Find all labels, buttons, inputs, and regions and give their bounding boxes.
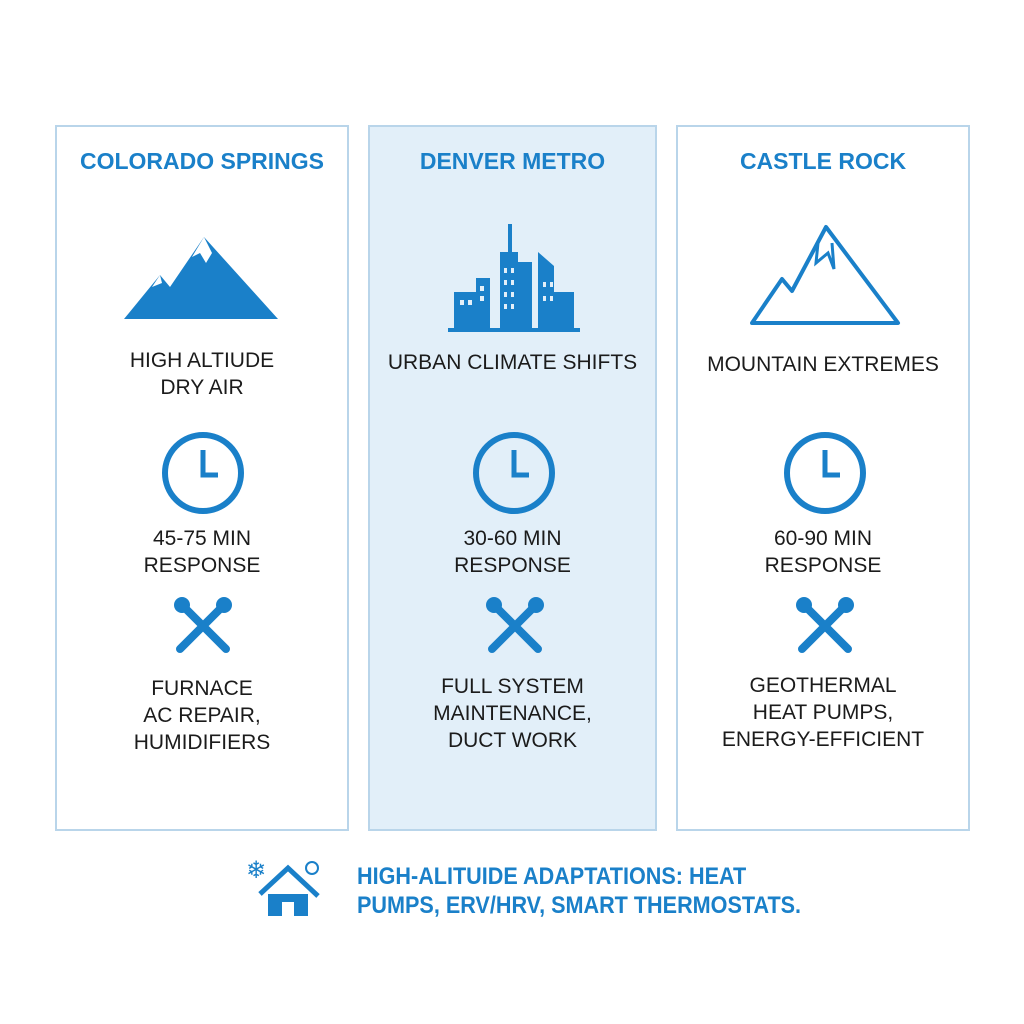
text: services: AC REPAIR, bbox=[143, 704, 261, 727]
text: services: FURNACE bbox=[151, 677, 253, 700]
text: response: RESPONSE bbox=[144, 554, 260, 577]
icon: tools bbox=[796, 597, 854, 653]
text: services: FULL SYSTEM bbox=[441, 675, 584, 698]
icon: mountain bbox=[124, 237, 278, 319]
text: services bbox=[134, 677, 270, 754]
footer text: PUMPS, ERV/HRV, SMART THERMOSTATS. bbox=[357, 892, 801, 919]
text: response: 30-60 MIN bbox=[463, 527, 562, 550]
icon: tools bbox=[486, 597, 544, 653]
text: climate: URBAN CLIMATE SHIFTS bbox=[388, 351, 637, 374]
icon: mountain outline bbox=[750, 224, 900, 325]
text: services: HUMIDIFIERS bbox=[134, 731, 270, 754]
heading: denver metro: DENVER METRO bbox=[420, 148, 605, 174]
text: services: HEAT PUMPS, bbox=[753, 701, 893, 724]
icon: clock bbox=[473, 432, 555, 514]
text: response: RESPONSE bbox=[765, 554, 881, 577]
text: response bbox=[144, 527, 260, 577]
icon: house with snow and sun: ❄ bbox=[246, 856, 266, 884]
text: response: 45-75 MIN bbox=[153, 527, 251, 550]
text: response bbox=[454, 527, 571, 577]
panel: denver metro bbox=[368, 125, 657, 831]
text: services: GEOTHERMAL bbox=[749, 674, 897, 697]
panel: castle rock bbox=[676, 125, 970, 831]
panel: colorado springs bbox=[55, 125, 349, 831]
text: services: ENERGY-EFFICIENT bbox=[722, 728, 924, 751]
footer text: HIGH-ALITUIDE ADAPTATIONS: HEAT bbox=[357, 863, 746, 890]
text: services: DUCT WORK bbox=[448, 729, 577, 752]
icon: clock bbox=[162, 432, 244, 514]
icon: city bbox=[448, 224, 580, 332]
text: climate: MOUNTAIN EXTREMES bbox=[707, 353, 939, 376]
heading: castle rock: CASTLE ROCK bbox=[740, 148, 906, 174]
icon: clock bbox=[784, 432, 866, 514]
text: climate bbox=[130, 349, 274, 399]
text: response: RESPONSE bbox=[454, 554, 571, 577]
text: climate: DRY AIR bbox=[160, 376, 244, 399]
text: response bbox=[765, 527, 881, 577]
text: services bbox=[722, 674, 924, 751]
icon: tools bbox=[174, 597, 232, 653]
heading: colorado springs: COLORADO SPRINGS bbox=[80, 148, 324, 174]
text: services bbox=[433, 675, 592, 752]
text: response: 60-90 MIN bbox=[774, 527, 872, 550]
footer text bbox=[357, 863, 801, 919]
text: climate: HIGH ALTIUDE bbox=[130, 349, 274, 372]
text: services: MAINTENANCE, bbox=[433, 702, 592, 725]
icon: house with snow and sun bbox=[246, 856, 320, 916]
